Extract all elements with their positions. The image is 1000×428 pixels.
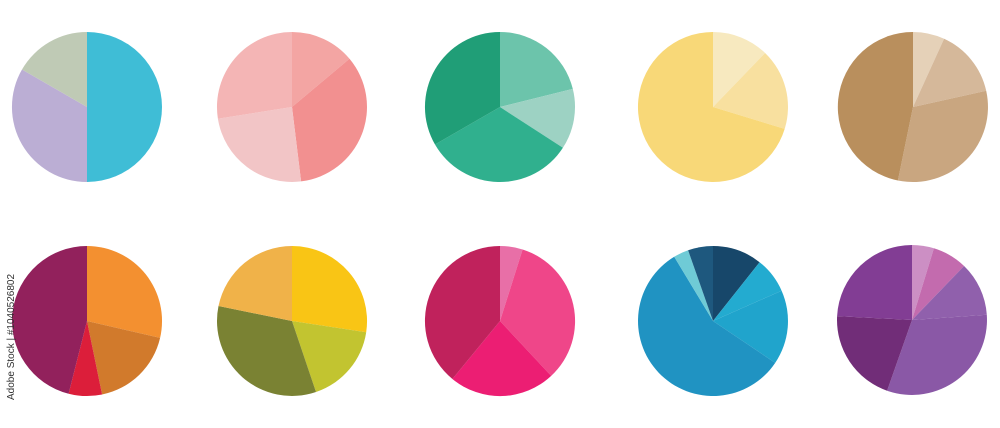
pie 5: browns	[838, 32, 988, 182]
side caption: Adobe Stock | #1040526802	[6, 274, 17, 400]
pie 3: greens	[425, 32, 575, 182]
pie 1: blue/purple/gray	[12, 32, 162, 182]
pie 6: orange/red/maroon	[12, 246, 162, 396]
pie 7: yellow/olive	[217, 246, 367, 396]
pie 10: purples	[837, 245, 987, 395]
pie 2: pinks	[217, 32, 367, 182]
pie 8: magentas	[425, 246, 575, 396]
pie 9: blues	[638, 246, 788, 396]
pie 4: yellows	[638, 32, 788, 182]
